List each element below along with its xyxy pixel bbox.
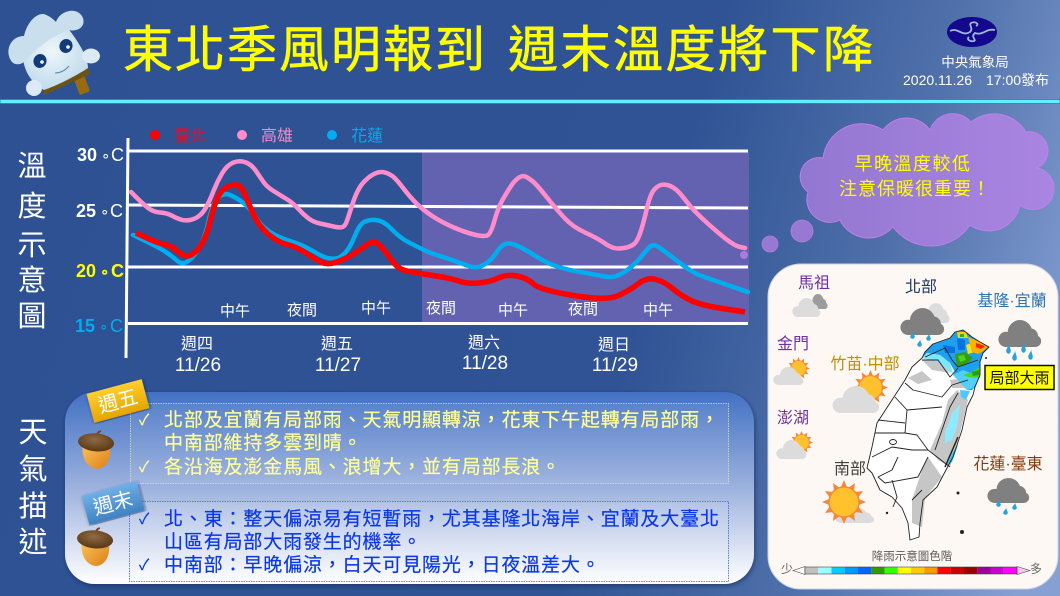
panel: weather description (65, 379, 754, 584)
box: weekend: ✓ (139, 511, 150, 528)
header divider (0, 100, 1060, 104)
map of Taiwan (867, 330, 989, 540)
date labels: 週六 (468, 334, 500, 352)
date labels: 11/26 (175, 355, 221, 376)
axis label: 30°C: 30 (77, 145, 97, 165)
callout: local heavy rain: 局部大雨 (989, 370, 1050, 387)
axis label: 25°C: C (110, 201, 123, 221)
label: Kinmen: 金門 (777, 335, 809, 353)
mascot: cloud chef (8, 11, 100, 96)
issue date: 2020.11.26 (903, 72, 972, 88)
time of day labels: 中午 (220, 303, 250, 320)
chart legend: 臺北 (174, 127, 206, 145)
time of day labels: 中午 (361, 300, 391, 317)
chart legend: 高雄 (261, 127, 293, 145)
time of day labels (220, 300, 673, 320)
icon: acorn weekend (76, 528, 114, 566)
label: Penghu: 澎湖 (777, 409, 809, 427)
section heading: weather description: 天 (18, 417, 48, 449)
rainfall colour scale: 少 (781, 562, 793, 576)
time of day labels: 夜間 (568, 301, 598, 318)
rainfall colour scale: 降雨示意圖色階 (872, 549, 953, 563)
section heading: temperature chart: 示 (17, 230, 47, 262)
date labels: 11/28 (462, 353, 508, 374)
box: Friday: ✓ (139, 412, 150, 429)
box: Friday: 中南部維持多雲到晴。 (164, 432, 363, 454)
line: Hualien (133, 194, 748, 292)
box: weekend: 山區有局部大雨發生的機率。 (164, 531, 422, 553)
section heading: temperature chart: 意 (17, 264, 47, 297)
label: south: 南部 (834, 460, 866, 478)
section heading: weather description: 述 (18, 526, 48, 559)
date labels: 11/29 (592, 355, 638, 376)
label: Hsinchu Miaoli central: 竹苗·中部 (830, 355, 900, 373)
section heading: temperature chart (17, 150, 47, 333)
rainfall colour scale: 多 (1030, 562, 1042, 576)
axis label: 25°C: ∘ (100, 204, 109, 221)
thought bubble callout (762, 114, 1054, 252)
label: Keelung Yilan: 基隆·宜蘭 (977, 292, 1047, 310)
axis label: 25°C: 25 (76, 201, 96, 221)
icon: Hualien rain cloud (987, 478, 1029, 515)
tag: weekend: 週末 (91, 487, 135, 520)
box: weekend: ✓ (139, 557, 150, 574)
time of day labels: 中午 (643, 302, 673, 319)
section heading: temperature chart: 圖 (17, 301, 47, 333)
icon: Penghu partly cloudy (776, 431, 813, 459)
icon: Matsu cloud (792, 294, 828, 317)
callout: local heavy rain (985, 366, 1054, 390)
time of day labels: 中午 (498, 302, 528, 319)
section heading: weather description: 描 (18, 490, 48, 523)
section heading: temperature chart: 度 (17, 190, 47, 223)
icon: north rain cloud (900, 303, 949, 347)
box: weekend: 中南部：早晚偏涼，白天可見陽光，日夜溫差大。 (164, 554, 601, 576)
section heading: weather description (18, 417, 48, 559)
tag: Friday: 週五 (96, 385, 140, 418)
line: Taipei (136, 185, 745, 312)
axis label: 20°C: ∘ (100, 264, 109, 281)
weekend shaded band (422, 152, 749, 323)
axis label: 30°C: C (111, 145, 124, 165)
date labels: 週日 (598, 336, 630, 354)
box: Friday: ✓ (139, 459, 150, 476)
thought bubble callout: 注意保暖很重要！ (839, 179, 991, 199)
icon: south sunny (822, 480, 874, 524)
icon: Keelung rain cloud (998, 320, 1041, 361)
title: 週末溫度將下降 (508, 22, 876, 78)
label: north: 北部 (905, 278, 937, 296)
axis label: 15°C: ∘ (99, 319, 108, 336)
temperature line chart (126, 138, 749, 358)
box: Friday: 各沿海及澎金馬風、浪增大，並有局部長浪。 (164, 456, 561, 478)
axis label: 20°C: 20 (76, 261, 96, 281)
agency name: 中央氣象局 (941, 55, 1009, 70)
chart legend (150, 127, 383, 145)
date labels (175, 334, 638, 376)
chart legend: 花蓮 (351, 127, 383, 145)
date labels: 週五 (321, 335, 353, 353)
time of day labels: 夜間 (287, 302, 317, 319)
rainfall colour scale (781, 549, 1042, 576)
date labels: 11/27 (315, 355, 361, 376)
purple end dot (740, 251, 748, 259)
section heading: temperature chart: 溫 (17, 150, 47, 183)
icon: central partly cloudy (832, 370, 888, 413)
icon: acorn Friday (77, 431, 115, 469)
tag: Friday (87, 379, 149, 423)
section heading: weather description: 氣 (18, 453, 48, 486)
line: Kaohsiung (131, 161, 745, 248)
tag: weekend (82, 481, 144, 525)
panel: rainfall map (768, 264, 1058, 589)
label: Matsu: 馬祖 (798, 274, 830, 292)
axis label: 15°C: 15 (75, 316, 95, 336)
issue date: 17:00發布 (986, 72, 1049, 88)
agency logo (947, 17, 997, 47)
title: 東北季風明報到 (123, 22, 487, 78)
thought bubble callout: 早晚溫度較低 (854, 154, 972, 174)
box: weekend (130, 502, 728, 582)
axis label: 15°C: C (110, 316, 123, 336)
icon: Kinmen partly cloudy (773, 357, 810, 385)
time of day labels: 夜間 (426, 300, 456, 317)
box: weekend: 北、東：整天偏涼易有短暫雨，尤其基隆北海岸、宜蘭及大臺北 (164, 508, 720, 530)
axis label: 20°C: C (111, 261, 124, 281)
box: Friday (130, 404, 728, 484)
axis label: 30°C: ∘ (101, 148, 110, 165)
box: Friday: 北部及宜蘭有局部雨、天氣明顯轉涼，花東下午起轉有局部雨， (164, 409, 720, 431)
date labels: 週四 (181, 335, 213, 353)
label: Hualien Taitung: 花蓮·臺東 (973, 455, 1043, 473)
